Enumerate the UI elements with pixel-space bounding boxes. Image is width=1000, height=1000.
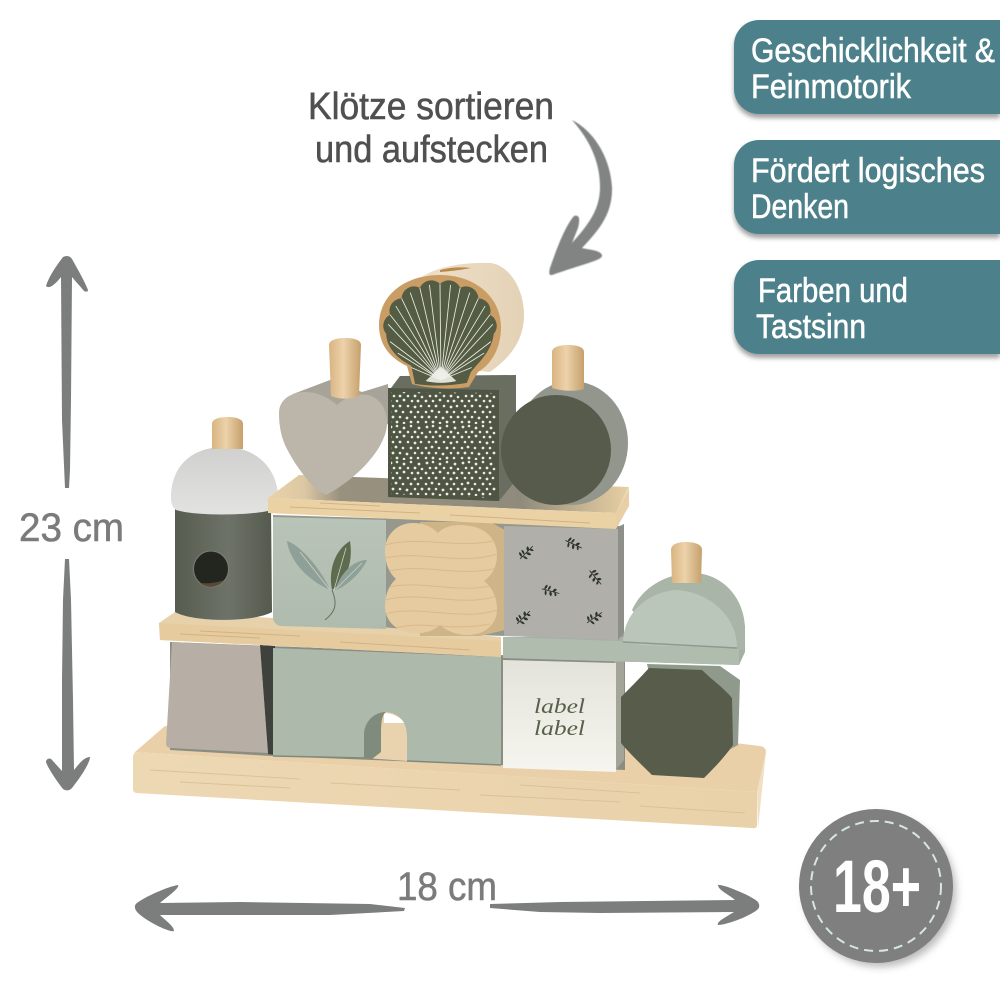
badge: colours and touch (734, 260, 1000, 358)
age badge 18+: 18+ (833, 845, 921, 928)
shadow backdrop: middle row (273, 515, 624, 640)
shelf: upper wooden (268, 475, 629, 529)
heading: sort and stack (308, 86, 554, 171)
block: round cylinder (501, 345, 628, 505)
heading: sort and stack: Klötze sortieren (308, 86, 554, 128)
block: heart (279, 338, 390, 495)
text: height 23 cm: 23 cm (19, 506, 124, 550)
arrow: width right (490, 885, 759, 925)
block: shell (379, 263, 524, 388)
badge: logical thinking: Denken (751, 188, 849, 226)
block: right dome (623, 542, 745, 650)
shadow backdrop: lower row (170, 642, 625, 770)
base board (133, 722, 766, 828)
block: label cube: label (534, 694, 585, 718)
arrow: curved pointing to toy (549, 120, 612, 275)
text: width 18 cm: 18 cm (397, 865, 497, 909)
block: wooden flower (385, 522, 505, 636)
heading: sort and stack: und aufstecken (315, 129, 548, 171)
base right edge (757, 752, 766, 828)
arrow: height up (46, 256, 88, 488)
block: white dome (171, 417, 278, 514)
block: leaf cube (273, 517, 386, 629)
block: octagon (621, 664, 740, 778)
peg (212, 417, 243, 449)
peg (671, 542, 702, 583)
arrow: height down (46, 559, 90, 790)
badge: colours and touch: Farben und (758, 272, 908, 310)
badge: colours and touch: Tastsinn (756, 308, 866, 346)
age badge 18+ (799, 809, 956, 967)
block: label cube (503, 660, 624, 772)
block: dark cylinder with hole (175, 505, 272, 620)
block: olive pattern cube (504, 524, 624, 640)
badge: logical thinking (734, 140, 1000, 238)
block: arch (273, 648, 501, 765)
base front face (133, 752, 757, 828)
block: label cube: label (534, 716, 585, 740)
peg (329, 338, 361, 399)
badge: dexterity: Feinmotorik (751, 68, 912, 106)
block: dotted cube (388, 375, 516, 501)
shelf: lower wooden (159, 612, 501, 657)
peg (552, 345, 584, 391)
block: taupe trapezoid (166, 642, 268, 753)
shelf: sage (503, 625, 745, 665)
toy: wooden stacking house (133, 263, 766, 828)
base top surface (135, 722, 766, 792)
shadow gap beside trapezoid (260, 645, 275, 755)
arrow: width left (135, 885, 405, 931)
badge: dexterity (734, 20, 1000, 118)
